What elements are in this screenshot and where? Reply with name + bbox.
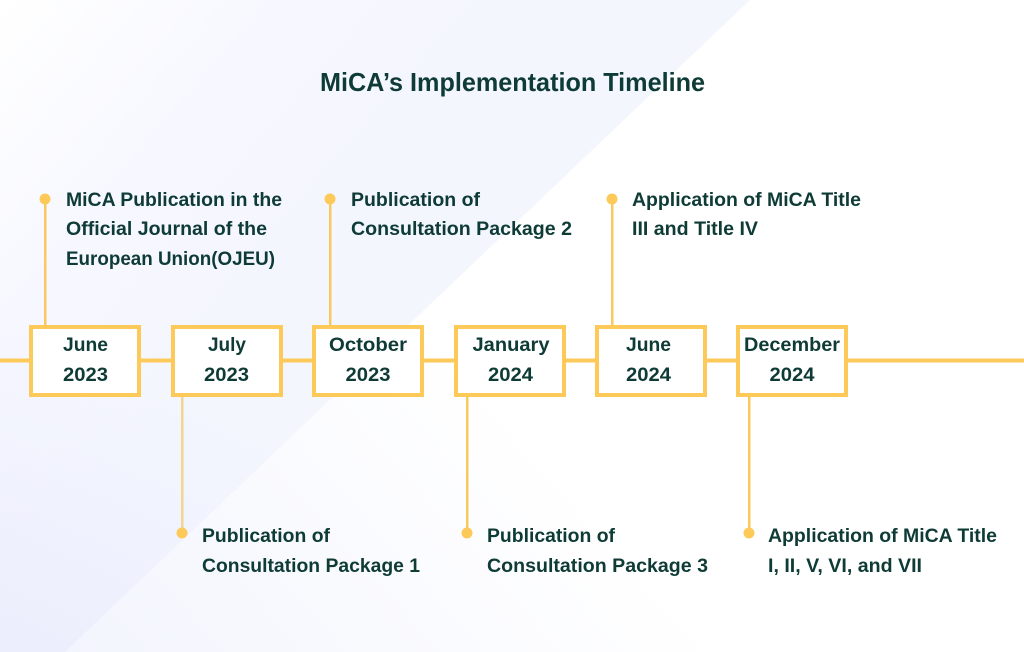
milestone: July 2023: July	[208, 334, 246, 356]
milestone: June 2023: Official Journal of the	[66, 218, 267, 240]
milestone: October 2023: 2023	[346, 364, 391, 386]
milestone: July 2023	[173, 327, 420, 577]
milestone: January 2024: Consultation Package 3	[487, 555, 708, 577]
milestone: June 2024: Application of MiCA Title	[632, 189, 861, 211]
milestone: October 2023: Consultation Package 2	[351, 218, 572, 240]
milestone: December 2024: 2024	[770, 364, 815, 386]
milestone: December 2024: December	[744, 334, 840, 356]
milestone: June 2024: 2024	[626, 364, 671, 386]
milestone: December 2024: I, II, V, VI, and VII	[768, 555, 922, 577]
milestone: June 2023: MiCA Publication in the	[66, 189, 282, 211]
milestone: October 2023	[314, 189, 572, 395]
milestone: July 2023: Publication of	[202, 525, 330, 547]
milestone: June 2024: June	[626, 334, 671, 356]
milestone: January 2024: Publication of	[487, 525, 615, 547]
milestone: January 2024: 2024	[488, 364, 533, 386]
milestone: December 2024: Application of MiCA Title	[768, 525, 997, 547]
milestone: July 2023: 2023	[204, 364, 249, 386]
milestone: December 2024	[738, 327, 997, 577]
milestone: June 2023	[31, 189, 282, 395]
milestone: January 2024	[456, 327, 708, 577]
milestone: October 2023: October	[329, 334, 407, 356]
title: MiCA’s Implementation Timeline	[320, 67, 705, 97]
milestone: January 2024: January	[472, 334, 550, 356]
milestone: June 2023: 2023	[63, 364, 108, 386]
milestone: June 2024: III and Title IV	[632, 218, 758, 240]
milestone: June 2023: June	[63, 334, 108, 356]
milestone: June 2023: European Union(OJEU)	[66, 248, 275, 270]
milestone: October 2023: Publication of	[351, 189, 480, 211]
timeline axis	[0, 358, 1024, 362]
milestone: July 2023: Consultation Package 1	[202, 555, 420, 577]
milestone: June 2024	[597, 189, 861, 395]
